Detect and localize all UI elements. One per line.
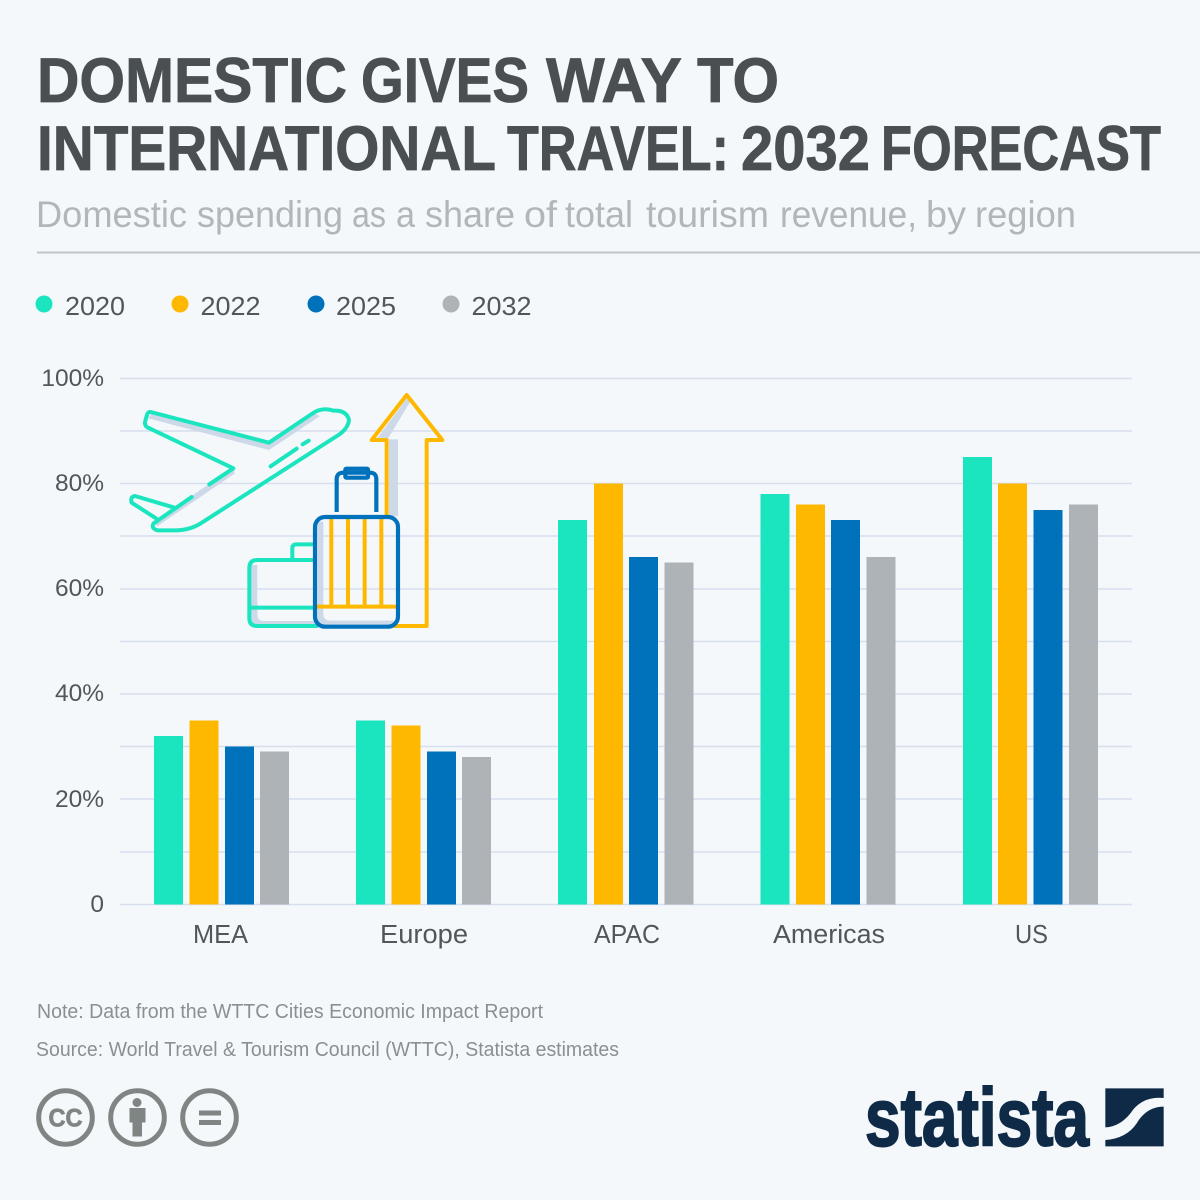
plane bbox=[131, 409, 349, 530]
y axis labels: 0 bbox=[90, 891, 104, 918]
bars: Europe bbox=[356, 720, 491, 904]
title: 2032 bbox=[741, 114, 870, 184]
bars: APAC bbox=[558, 484, 694, 904]
subtitle: total bbox=[565, 194, 633, 235]
legend: 2020 bbox=[65, 291, 125, 321]
briefcase bbox=[249, 544, 317, 626]
subtitle bbox=[36, 194, 1076, 235]
legend: 2022 bbox=[200, 291, 260, 321]
subtitle: revenue, bbox=[780, 194, 917, 235]
icon: no derivatives bbox=[183, 1091, 236, 1144]
legend: 2032 bbox=[472, 291, 532, 321]
title: INTERNATIONAL bbox=[37, 114, 496, 184]
subtitle: region bbox=[975, 194, 1076, 235]
source: Source: World Travel & Tourism Council (WTTC), Statista estimates bbox=[36, 1039, 619, 1061]
suitcase stripes bbox=[317, 518, 397, 607]
subtitle: tourism bbox=[646, 194, 769, 235]
y axis labels: 60% bbox=[55, 575, 104, 602]
y axis labels bbox=[41, 365, 104, 918]
title bbox=[37, 46, 1161, 184]
icon: attribution bbox=[111, 1091, 164, 1144]
x axis labels: Americas bbox=[773, 921, 885, 949]
note: Note: Data from the WTTC Cities Economic Impact Report bbox=[37, 1001, 543, 1023]
icon: plane, luggage and rising arrow bbox=[131, 395, 442, 627]
subtitle: a bbox=[396, 194, 415, 235]
statista wordmark: statista bbox=[865, 1072, 1090, 1164]
title: DOMESTIC bbox=[37, 46, 347, 116]
y axis labels: 20% bbox=[55, 786, 104, 813]
subtitle: of bbox=[524, 194, 558, 235]
suitcase bbox=[315, 469, 398, 627]
y axis labels: 40% bbox=[55, 680, 104, 707]
subtitle: share bbox=[425, 194, 515, 235]
legend bbox=[36, 291, 532, 321]
legend: 2025 bbox=[336, 291, 396, 321]
x axis labels: US bbox=[1015, 921, 1048, 949]
bars: Americas bbox=[760, 494, 896, 904]
subtitle: Domestic bbox=[36, 194, 187, 235]
subtitle: spending bbox=[197, 194, 343, 235]
y axis labels: 100% bbox=[41, 365, 104, 392]
bars: MEA bbox=[154, 720, 289, 904]
x axis labels: APAC bbox=[594, 921, 660, 949]
bars: US bbox=[963, 457, 1098, 904]
subtitle: as bbox=[352, 194, 386, 235]
icon: creative commons: CC bbox=[48, 1104, 82, 1132]
x axis labels: MEA bbox=[193, 921, 248, 949]
title: GIVES bbox=[361, 46, 529, 116]
statista logo mark bbox=[1105, 1088, 1164, 1146]
title: WAY bbox=[546, 46, 682, 116]
y axis labels: 80% bbox=[55, 470, 104, 497]
x axis labels: Europe bbox=[380, 921, 468, 949]
rising arrow bbox=[372, 395, 442, 626]
icon: creative commons bbox=[39, 1091, 92, 1144]
bar chart bbox=[154, 457, 1098, 904]
title: TO bbox=[697, 46, 779, 116]
subtitle: by bbox=[926, 194, 967, 235]
icon shadows bbox=[148, 398, 410, 626]
title: TRAVEL: bbox=[507, 114, 729, 184]
x axis labels bbox=[193, 921, 1048, 949]
